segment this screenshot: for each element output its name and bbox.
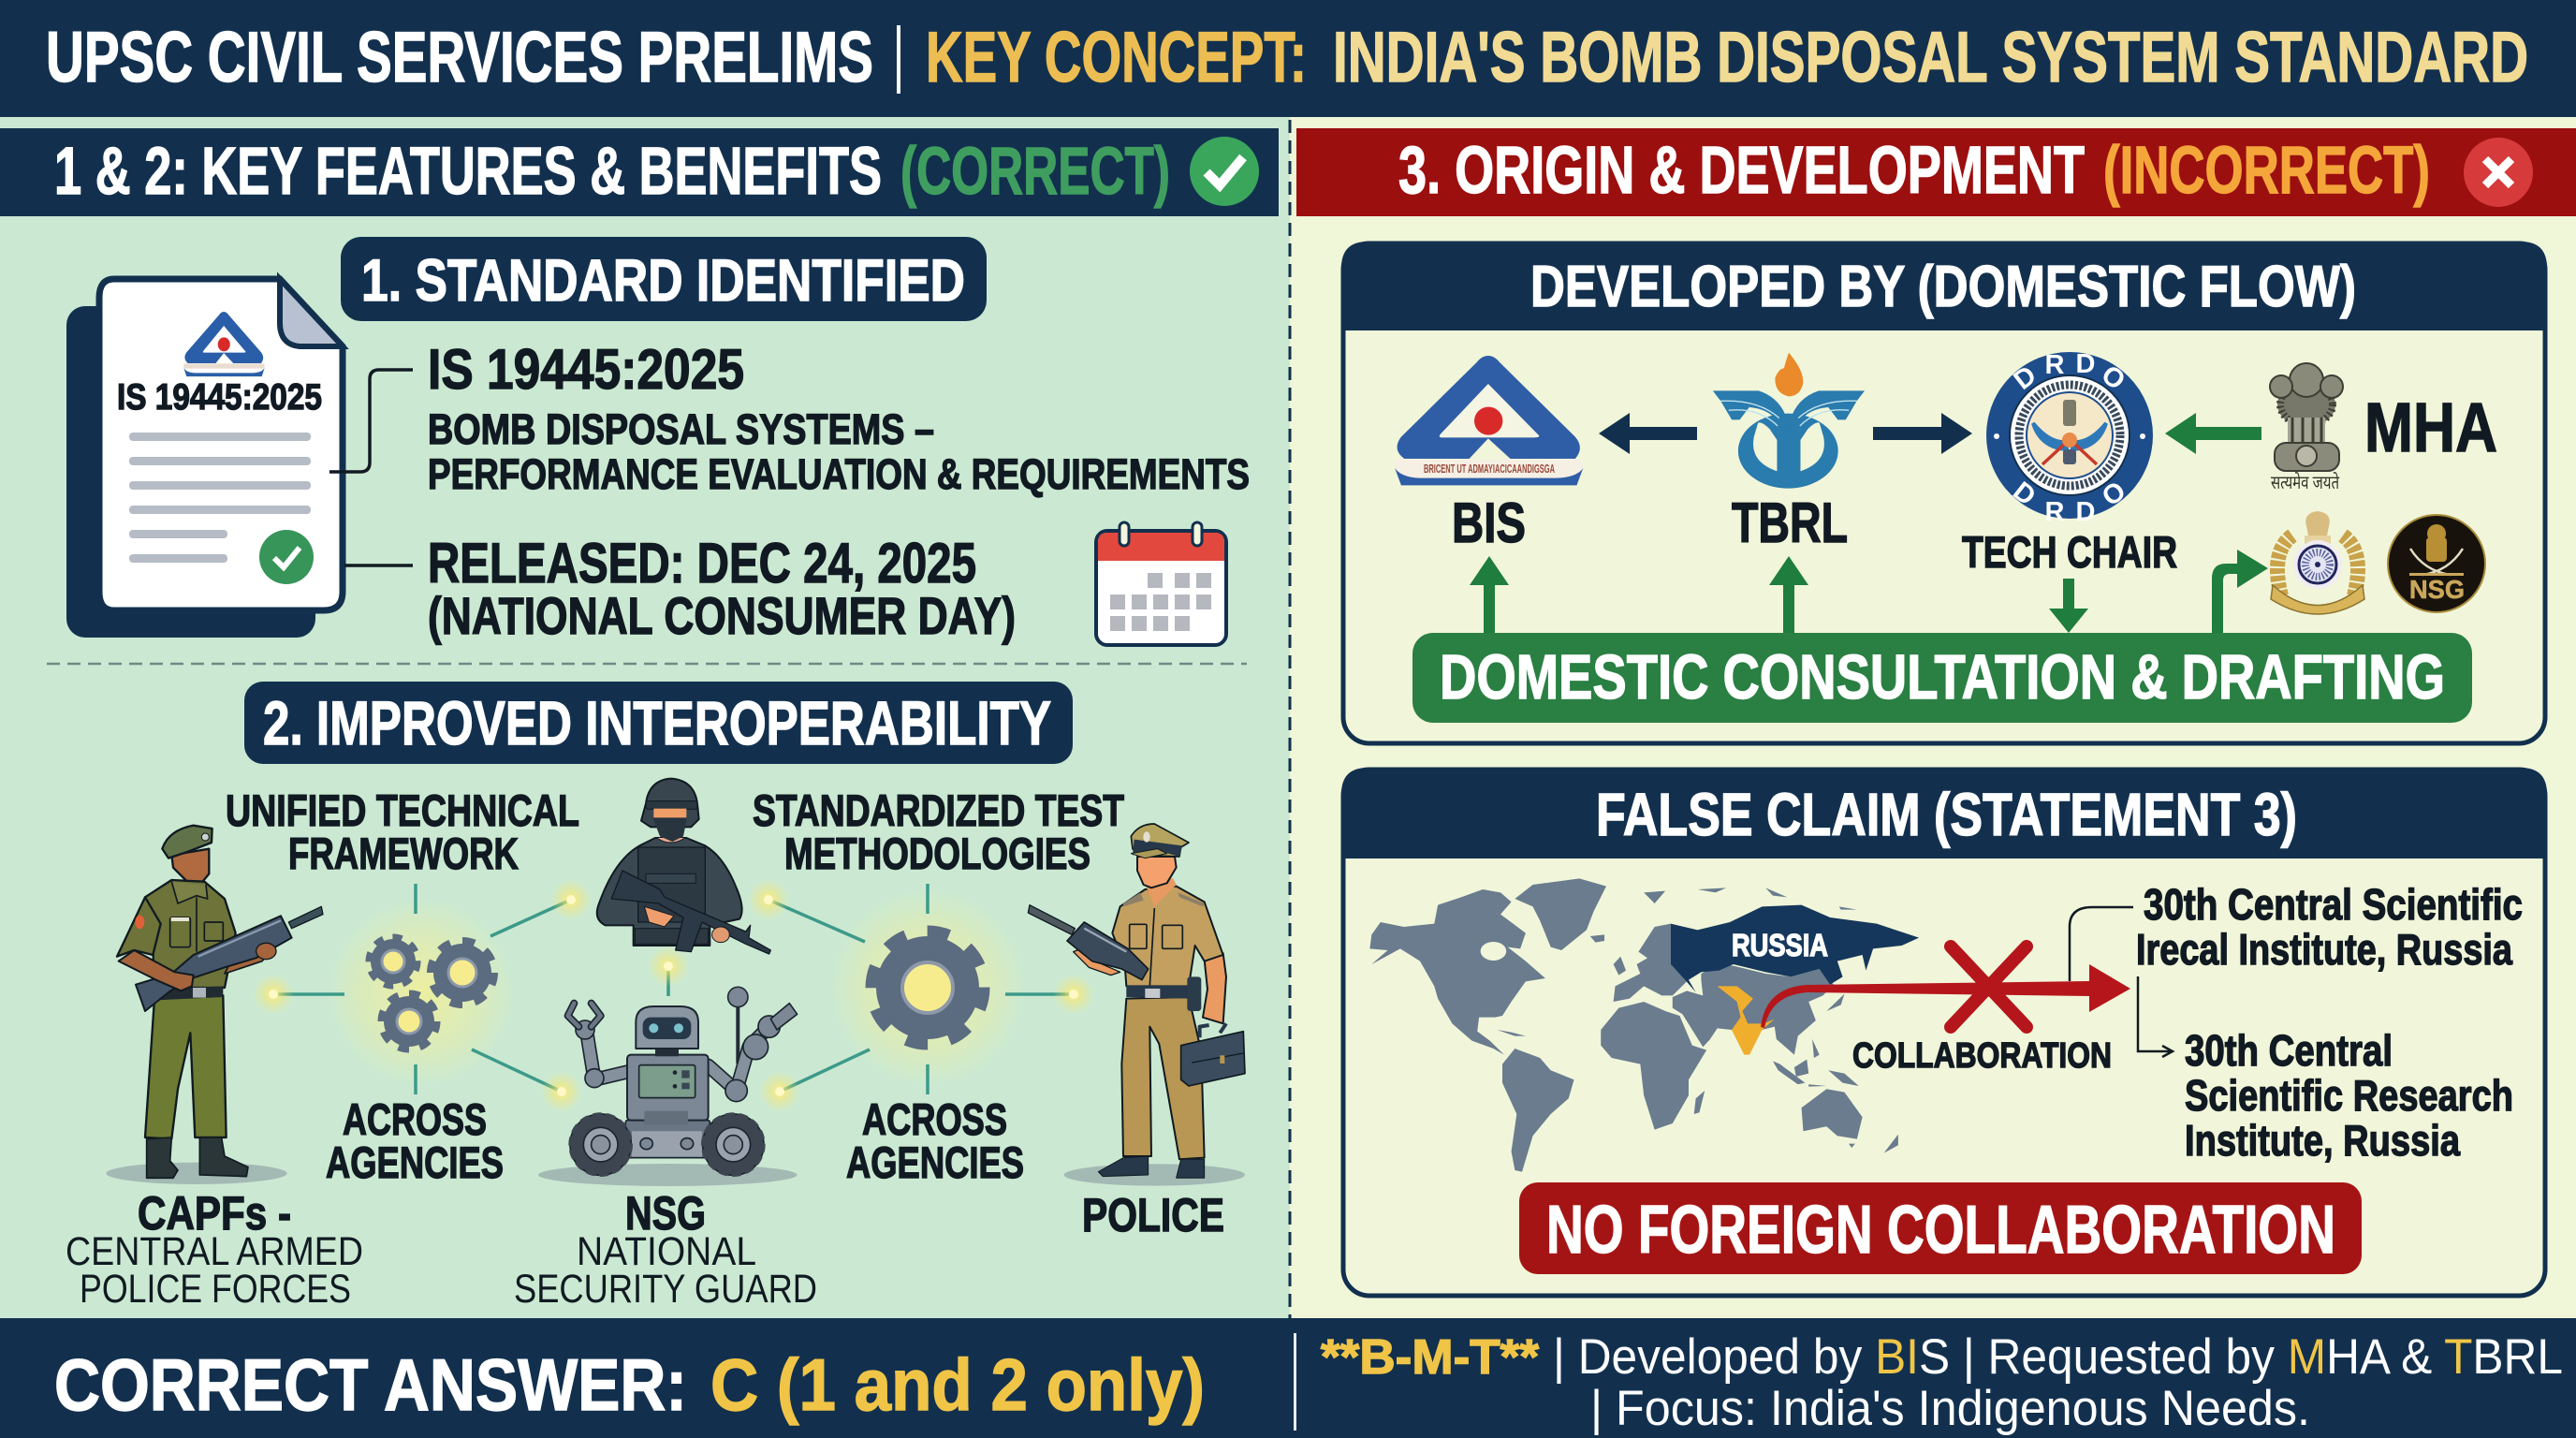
- icon: DRDO seal: D: [2007, 477, 2041, 512]
- text: release date: [428, 532, 1016, 645]
- title banner: UPSC CIVIL SERVICES PRELIMS: [46, 18, 873, 97]
- label: CAPFs: POLICE FORCES: [80, 1267, 351, 1312]
- section heading: improved interoperability: 2. IMPROVED INTEROPERABILITY: [263, 688, 1051, 757]
- text: national motto: सत्यमेव जयते: [2271, 472, 2339, 493]
- labels: shared technical framework and test methods: UNIFIED TECHNICAL: [226, 785, 579, 835]
- column divider: [1288, 120, 1292, 1318]
- label: CAPFs: CAPFs -: [138, 1187, 291, 1240]
- labels: across agencies: AGENCIES: [326, 1137, 504, 1187]
- glow and connectors: interoperability network: [253, 879, 1094, 1112]
- text: release date: (NATIONAL CONSUMER DAY): [428, 586, 1016, 645]
- labels: across agencies: ACROSS: [343, 1094, 487, 1144]
- panel heading: origin and development (incorrect): (INCORRECT): [2103, 134, 2430, 208]
- illustration: CAPF soldier: [106, 826, 323, 1184]
- text: standard name and scope: BOMB DISPOSAL SYSTEMS –: [428, 405, 934, 453]
- title banner: KEY CONCEPT:: [926, 18, 1307, 97]
- labels: across agencies: [326, 1094, 1024, 1187]
- labels: shared technical framework and test methods: METHODOLOGIES: [784, 829, 1090, 878]
- label: tech chair: TECH CHAIR: [1962, 527, 2177, 577]
- arrow: MHA to DRDO: [2165, 413, 2261, 454]
- label: police: POLICE: [1082, 1189, 1224, 1241]
- label: NSG: NATIONAL: [577, 1229, 756, 1274]
- label: NSG: SECURITY GUARD: [514, 1267, 817, 1312]
- text: standard name and scope: IS 19445:2025: [428, 338, 744, 401]
- banner: no foreign collaboration: NO FOREIGN COLLABORATION: [1546, 1193, 2335, 1268]
- icon: NSG badge: NSG: [2409, 575, 2465, 604]
- panel: false claim: [1341, 768, 2547, 1296]
- icon: three gears: [370, 938, 493, 1049]
- label: BIS: BIS: [1452, 492, 1526, 554]
- icon: standards document: [66, 279, 343, 638]
- panel heading: key features (correct): (CORRECT): [900, 135, 1170, 209]
- banner: no foreign collaboration: [1519, 1182, 2362, 1274]
- text: claimed institute: Institute, Russia: [2185, 1116, 2460, 1165]
- panel heading: origin and development (incorrect): 3. ORIGIN & DEVELOPMENT: [1398, 134, 2085, 208]
- text: release date: RELEASED: DEC 24, 2025: [428, 532, 976, 594]
- heading: false claim: FALSE CLAIM (STATEMENT 3): [1596, 781, 2297, 848]
- icon: DRDO seal: D: [2009, 360, 2042, 396]
- icon: CRPF style crest: [2271, 511, 2364, 614]
- label: MHA: MHA: [2364, 389, 2497, 466]
- text: claimed institute: 30th Central: [2185, 1026, 2393, 1075]
- text: standard name and scope: PERFORMANCE EVALUATION & REQUIREMENTS: [428, 450, 1250, 498]
- correct answer: CORRECT ANSWER:: [54, 1343, 687, 1426]
- section heading: standard identified: [341, 237, 987, 321]
- icon: DRDO seal: O: [2096, 360, 2130, 396]
- icon: DRDO seal: D: [2076, 497, 2095, 527]
- icon: national emblem: [2270, 363, 2343, 493]
- panel heading: origin and development (incorrect): [1296, 128, 2576, 216]
- arrow: TBRL to BIS: [1599, 413, 1697, 454]
- icon: DRDO seal: [1986, 349, 2153, 527]
- arrow: claimed collaboration: [1761, 964, 2130, 1028]
- mnemonic note: [1321, 1329, 2563, 1436]
- connector: document to standard name: [329, 370, 413, 472]
- labels: across agencies: ACROSS: [862, 1094, 1007, 1144]
- connector: claim to institute name: [2138, 976, 2173, 1057]
- labels: shared technical framework and test methods: STANDARDIZED TEST: [753, 785, 1124, 835]
- label: CAPFs: [66, 1187, 363, 1312]
- mnemonic note: **B-M-T**: [1321, 1330, 1540, 1385]
- section heading: standard identified: 1. STANDARD IDENTIFIED: [361, 248, 965, 314]
- label: collaboration: COLLABORATION: [1852, 1036, 2112, 1076]
- icon: approval seal: [259, 530, 314, 584]
- text: standard name and scope: [428, 338, 1250, 498]
- icon: standards document: IS 19445:2025: [117, 377, 322, 418]
- text: claimed institute: [2185, 1026, 2513, 1165]
- arrow: consultation up to BIS: [1470, 556, 1509, 633]
- icon: BIS logo small: [183, 312, 265, 376]
- icon: red cross over arrow: [1951, 946, 2027, 1027]
- label: NSG: [514, 1187, 817, 1312]
- labels: shared technical framework and test methods: FRAMEWORK: [288, 829, 519, 878]
- icon: DRDO seal: D: [2076, 349, 2095, 379]
- mnemonic note: | Developed by BIS | Requested by MHA & TBRL: [1553, 1329, 2563, 1385]
- illustration: NSG commando: [597, 779, 770, 954]
- illustration: police officer: [1028, 824, 1245, 1186]
- icon: DRDO seal: R: [2045, 497, 2065, 527]
- arrow: TBRL to DRDO: [1873, 413, 1972, 454]
- arrow: consultation up to TBRL: [1769, 556, 1808, 633]
- label: Russia: RUSSIA: [1732, 928, 1828, 962]
- panel heading: key features (correct): 1 & 2: KEY FEATURES & BENEFITS: [54, 135, 882, 209]
- text: claimed institute garbled: [2136, 880, 2523, 974]
- icon: DRDO seal: R: [2045, 350, 2065, 380]
- label: CAPFs: CENTRAL ARMED: [66, 1229, 363, 1274]
- heading: developed by: DEVELOPED BY (DOMESTIC FLOW): [1530, 255, 2356, 319]
- correct answer: C (1 and 2 only): [710, 1343, 1205, 1426]
- section heading: improved interoperability: [244, 682, 1073, 764]
- panel: developed by domestic flow: [1341, 242, 2547, 743]
- mnemonic note: | Focus: India's Indigenous Needs.: [1590, 1381, 2310, 1436]
- icon: TBRL logo: [1713, 353, 1865, 489]
- icon: BIS logo: [1395, 356, 1583, 485]
- footer bar: [0, 1318, 2576, 1438]
- arrow: tech chair down to consultation: [2049, 579, 2088, 633]
- connector: document to release date: [344, 564, 413, 567]
- map: world with Russia and India highlighted: [1369, 878, 1919, 1172]
- arrow: consultation to security forces: [2212, 550, 2268, 633]
- labels: shared technical framework and test methods: [226, 785, 1124, 878]
- label: NSG: NSG: [625, 1187, 706, 1240]
- correct answer: [54, 1343, 1205, 1426]
- text: claimed institute: Scientific Research: [2185, 1071, 2513, 1120]
- icon: calendar: [1096, 522, 1226, 645]
- labels: across agencies: AGENCIES: [846, 1137, 1024, 1187]
- icon: BIS logo: BRICENT UT ADMAYIACICAANDIGSGA: [1424, 462, 1555, 476]
- icon: DRDO seal: O: [2097, 476, 2131, 512]
- title banner: [0, 0, 2576, 117]
- label: TBRL: TBRL: [1732, 492, 1848, 554]
- illustration: bomb disposal robot: [538, 987, 798, 1186]
- connector: arrow to claim text: [2070, 907, 2133, 981]
- icon: NSG badge: [2388, 515, 2485, 612]
- icon: large gear: [872, 932, 983, 1043]
